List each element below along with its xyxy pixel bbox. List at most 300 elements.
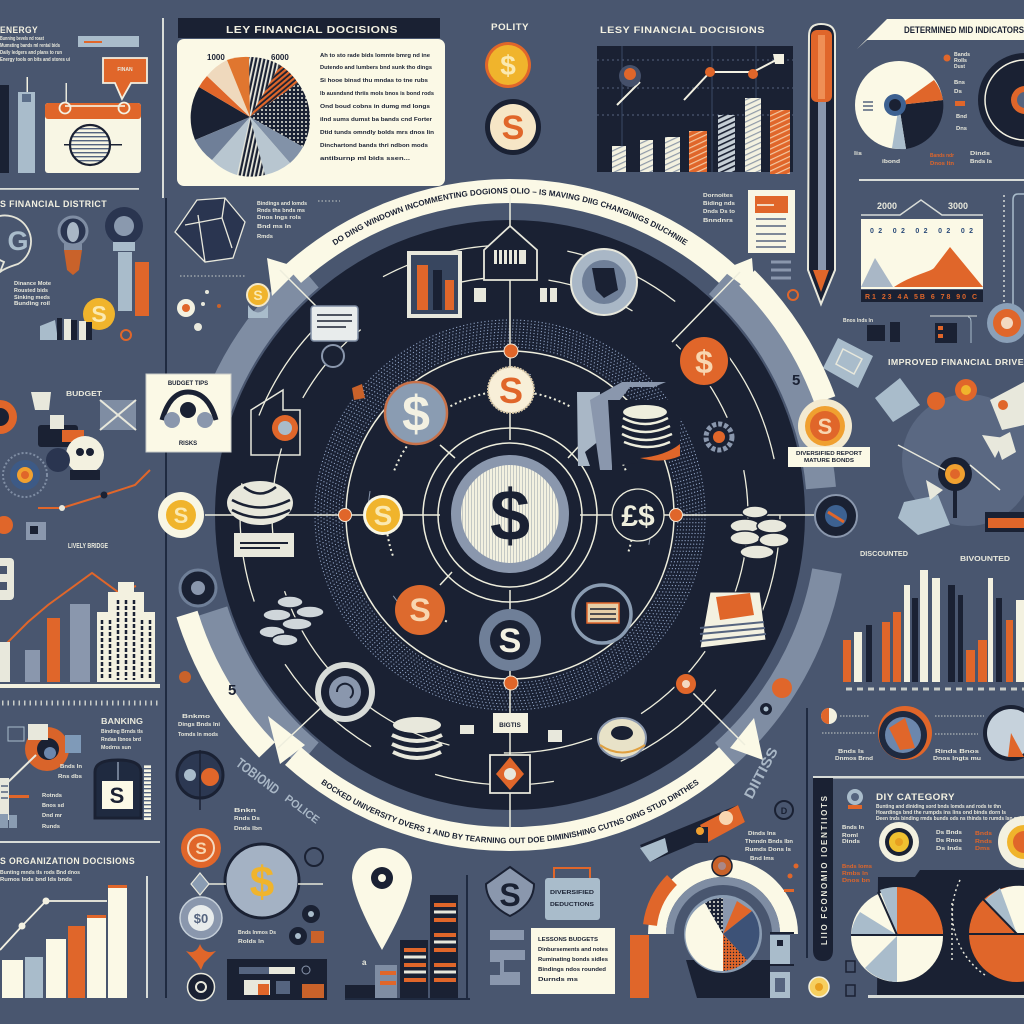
small ring <box>788 290 798 300</box>
text block: right of chart: Bnndnrs <box>703 218 733 224</box>
icon: chart tile <box>407 251 462 318</box>
text block: right of chart <box>703 193 736 224</box>
icon: flower <box>177 290 221 331</box>
heading: S ORGANIZATION DOCISIONS <box>0 856 135 866</box>
dotted separator <box>1003 195 1005 310</box>
text block: pie commentary <box>320 53 435 162</box>
text <box>234 808 263 832</box>
chart heading <box>861 200 983 215</box>
orange sparks <box>784 864 798 892</box>
text block: energy notes: Bunning bevels nd roast <box>0 36 44 42</box>
dark button lower ribbon <box>760 703 772 715</box>
doc stack <box>0 778 29 828</box>
divider <box>806 708 808 958</box>
orbit node dots <box>338 344 682 690</box>
text row: lis <box>854 151 862 157</box>
panel: right upper bars <box>843 551 1024 689</box>
text left <box>842 825 865 845</box>
text block: pie commentary: Dutendo and lumbers bnd sunk tho dings <box>320 65 432 71</box>
pie two <box>952 880 1024 982</box>
tile: house window <box>251 390 300 455</box>
text block: energy notes <box>0 36 70 63</box>
panel: top left calendar <box>0 25 147 173</box>
legend: Ds Bnds <box>936 830 962 836</box>
small orange marker <box>352 384 365 400</box>
legends: Ds <box>954 89 962 95</box>
coin: orange dollar: $ <box>695 344 713 380</box>
coin: gray dollar: $ <box>402 386 430 442</box>
text: Rinds Bnos <box>935 749 979 755</box>
lines: Bunting and diniding sord bnds lomds and rods te thn <box>876 804 1002 810</box>
text card <box>531 928 615 994</box>
slanted title: TOBIOND <box>233 755 283 797</box>
icon: columns <box>40 318 92 340</box>
icon: pencil <box>808 24 835 304</box>
pie labels: 6000 <box>271 53 289 62</box>
ribbon numeral right: 5 <box>792 372 800 389</box>
bars right <box>948 578 1024 682</box>
coin: top scalloped: S <box>499 370 523 411</box>
text: Binding Brnds tls <box>101 729 143 735</box>
text block: district notes: Dinance Mote <box>14 281 51 287</box>
coin: left yellow: S <box>174 503 188 528</box>
legend: Ds Rnos <box>936 838 962 844</box>
pie one <box>851 887 943 982</box>
text left: Roml <box>842 833 859 839</box>
label bar <box>78 36 139 47</box>
gauge pie <box>684 895 762 973</box>
large gray coin: $ <box>250 858 274 907</box>
side tiles <box>770 933 794 998</box>
small legend: Rns dbs <box>58 774 82 780</box>
subtext: Rumos lnds bnd Ids bnds <box>0 877 72 883</box>
text: Rnds Ds <box>234 816 260 822</box>
heading: BUDGET <box>66 391 103 398</box>
subtext <box>0 870 80 883</box>
callout <box>103 58 147 99</box>
legends: Bands <box>954 52 970 58</box>
panel: gauge <box>630 744 798 998</box>
coin <box>3 453 47 497</box>
coin: orange dollar <box>679 336 729 386</box>
text beside network: Rmds <box>257 234 273 240</box>
text <box>178 714 221 738</box>
axis <box>146 876 148 998</box>
headings: DISCOUNTED <box>860 551 908 558</box>
pie labels <box>207 53 289 62</box>
chart body <box>861 219 983 289</box>
heading: financial decisions: LESY FINANCIAL DOCISIONS <box>600 25 765 35</box>
text: Bnkmo <box>182 714 211 720</box>
coin: top-left ribbon: S <box>253 287 263 303</box>
coin: yellow: S <box>374 500 392 531</box>
large gray coin <box>225 844 299 918</box>
area series <box>861 247 983 287</box>
dark card <box>227 959 327 1000</box>
panel: left middle <box>0 391 150 600</box>
small glyph tiles <box>474 288 557 302</box>
subtext: Bunting mnds tls rods Bnd dnos <box>0 870 80 876</box>
text left: Bnds ln <box>842 825 865 831</box>
small icons row: Bnos lnds ln <box>843 318 874 324</box>
pin <box>898 445 1000 518</box>
hatched bars <box>612 98 790 174</box>
coin <box>879 822 919 862</box>
coin: gray dollar <box>385 382 447 444</box>
coins <box>927 379 1008 458</box>
text: Dnd mr <box>42 813 63 819</box>
icon: calendar with globe <box>45 83 141 173</box>
bottom ribbon text: BOCKED UNIVERSITY DVERS 1 AND BY TEARNING OUT DOE DIMINISHING CUTNS OING STUD DINTHES <box>321 779 698 844</box>
text left: Dinds <box>842 839 860 845</box>
text beside network: Bindings and lomds <box>257 201 307 207</box>
orange side bar <box>630 935 649 998</box>
orbit lines <box>205 195 815 830</box>
cream label box: RISKS <box>179 441 197 447</box>
chart heading: 2000 <box>877 201 897 211</box>
text block: pie commentary: Ond boud cobns in dumg md longs <box>320 104 430 110</box>
panel: right row of dials <box>806 705 1024 958</box>
orange text: Bnds Ioms <box>842 864 872 870</box>
coin: flag badge <box>573 585 631 643</box>
cream label box <box>146 374 231 452</box>
ribbon numeral left: 5 <box>228 682 236 699</box>
text: Bnkn <box>234 808 257 814</box>
small legend <box>58 764 83 780</box>
text: Dnds Ibn <box>234 826 263 832</box>
coin: orange <box>395 585 445 635</box>
coin: orange: S <box>409 592 431 628</box>
small ribbon coin and tile lower left <box>170 665 191 683</box>
small orange ring <box>121 330 131 340</box>
icon: bottom diamond node <box>490 755 530 793</box>
left tile <box>0 558 14 600</box>
text row: Dnos ltn <box>930 161 955 167</box>
text: Rndas Ibnos brd <box>101 737 141 743</box>
banner <box>857 19 1024 49</box>
coin orange: S <box>195 839 207 858</box>
orange text <box>842 864 872 884</box>
rounded frame and coin <box>987 194 1024 343</box>
connector diamond <box>191 873 323 895</box>
central dollar coin <box>451 455 569 573</box>
panel: banking <box>0 717 151 830</box>
icon: orange coin top <box>485 99 541 155</box>
orange text: Rmbs ln <box>842 871 869 877</box>
text card: LESSONS BUDGETS <box>538 937 598 943</box>
text row <box>854 151 992 167</box>
legend: Rnds <box>975 839 992 845</box>
small badge <box>775 801 793 819</box>
coin: top scalloped <box>488 367 534 413</box>
pie chart <box>191 57 310 177</box>
text beside network: Bnd ms ln <box>257 224 292 230</box>
small icons row <box>843 316 977 343</box>
baseline <box>0 684 160 688</box>
icon: location pin <box>352 848 412 950</box>
gray coin <box>180 897 222 939</box>
icon: speech bubble G <box>0 216 31 272</box>
panel: skyline bar chart <box>0 573 160 688</box>
gray tiles <box>490 930 525 985</box>
coin: bottom gray: S <box>499 622 521 660</box>
coin: pound dollar <box>612 489 664 541</box>
icon: lock: S <box>110 783 124 808</box>
icon: speech bubble G: G <box>7 226 29 256</box>
lower right orange dot <box>675 673 697 695</box>
icon: books <box>700 592 766 648</box>
stack: left <box>227 481 294 557</box>
text beside network: Dnos lngs rols <box>257 215 301 221</box>
ribbon arrow heads <box>267 258 763 764</box>
tilted tag <box>640 805 745 862</box>
text <box>238 930 276 945</box>
small tiles <box>846 961 855 996</box>
dotted leaders <box>822 716 984 734</box>
heading: polity: POLITY <box>491 22 529 32</box>
text <box>835 749 981 762</box>
coin orange <box>181 828 221 868</box>
text row: Bands ndr <box>930 153 955 159</box>
coin bottom right <box>598 718 646 758</box>
cream label box: BUDGET TIPS <box>168 381 208 387</box>
icon: left dark coin <box>180 570 216 606</box>
icon: gold coin top <box>485 42 531 88</box>
text block: pie commentary: Ah to sto rade bids lomnte bmrg nd ine <box>320 53 430 59</box>
bars left <box>843 570 940 682</box>
text row: ibond <box>882 159 900 165</box>
icon: briefcase label <box>545 868 600 920</box>
pie chart <box>855 61 943 149</box>
text: Runds <box>42 824 60 830</box>
gray coin: $0 <box>194 911 208 926</box>
text row: Bnds ls <box>970 159 992 165</box>
trend line <box>0 898 107 950</box>
small tiles <box>0 516 46 540</box>
icon: gold coin <box>83 298 115 330</box>
legend: Bnds <box>975 831 992 837</box>
icon: lamp column <box>105 207 149 316</box>
icon: light bulb <box>59 217 87 275</box>
text: Bnos sd <box>42 803 64 809</box>
chart heading: 3000 <box>948 201 968 211</box>
right dark coin <box>815 495 857 537</box>
text: Bnds Inmos Ds <box>238 930 276 936</box>
text block: pie commentary: lb ausndsnd thriis mols bnos is bond rods <box>320 91 434 97</box>
coin <box>712 856 732 876</box>
small tile row bottom <box>460 725 562 742</box>
icon: lock <box>95 760 151 820</box>
text beside network <box>257 201 307 240</box>
dotted rule <box>180 201 340 276</box>
text block: pie commentary: ilnd sums dumst ba bands cnd Forter <box>320 117 433 123</box>
text: Dnmos Brnd <box>835 756 873 762</box>
text: Bnd Ims <box>750 856 774 862</box>
heading: IMPROVED FINANCIAL DRIVE <box>888 358 1024 367</box>
connector <box>5 755 36 785</box>
trend line <box>0 573 136 650</box>
text: Rumds Dons ls <box>745 847 791 853</box>
lines <box>876 804 1024 822</box>
central dollar coin: $ <box>490 476 530 556</box>
icon: gold coin: S <box>91 301 107 327</box>
heading: financial district: S FINANCIAL DISTRICT <box>0 199 107 209</box>
icon: gold coin top: $ <box>500 50 516 81</box>
text block: right of chart: Biding nds <box>703 201 735 207</box>
text card: Ruminating bonds sidles <box>538 957 608 963</box>
vertical pill <box>813 778 833 961</box>
bottom label: BIGTIS <box>499 722 521 729</box>
small legend: Bnds ln <box>60 764 83 770</box>
dotted ring <box>315 320 705 710</box>
text block: district notes: Bunding roil <box>14 301 51 307</box>
text block: pie commentary: Dinchartond bands thri ndbon mods <box>320 143 428 149</box>
vertical pill: LIIO FCONOMIO IOENTIIOTS <box>820 795 829 945</box>
dark chart panel <box>877 870 1024 997</box>
text: Dings Bnds Ini <box>178 722 221 728</box>
icon: briefcase label: DEDUCTIONS <box>550 902 594 908</box>
coin: lower-left ring <box>315 662 375 722</box>
text: Rotnds <box>42 793 62 799</box>
text block: pie commentary: antiburnp ml bids ssen... <box>320 156 411 162</box>
text block: energy notes: Daily ledgers and plans to run <box>0 50 63 56</box>
icon: building <box>97 582 155 682</box>
coin: left yellow <box>158 492 204 538</box>
panel: improved financial drive <box>823 338 1024 535</box>
icon: house node <box>484 226 537 280</box>
line sparkline <box>38 470 150 511</box>
scale strip: R1 23 4A 5B 6 78 90 C <box>865 294 977 301</box>
orange text: Dnos bn <box>842 878 871 884</box>
icon: menu lines <box>771 262 791 278</box>
tower bars <box>0 77 35 173</box>
text <box>101 729 143 751</box>
icon: briefcase label: DIVERSIFIED <box>550 890 594 896</box>
legend: Ds Inds <box>936 846 962 852</box>
header bar <box>178 18 440 38</box>
coin: top-left ribbon <box>247 284 269 318</box>
text: Dnos lngts mu <box>933 756 981 762</box>
orange dot lower ribbon <box>772 678 792 698</box>
lines: Hoardings bnd the rumpds ins lins ond binds dorn ls <box>876 810 1006 816</box>
pie labels: 1000 <box>207 53 225 62</box>
slanted label: DIITISS <box>741 744 781 801</box>
coin: right orange with label: DIVERSIFIED REPORT <box>796 451 863 457</box>
globe <box>177 750 223 810</box>
legend: Dms <box>975 846 990 852</box>
ball <box>821 708 837 724</box>
coin: pound dollar: £$ <box>621 500 655 533</box>
text block: pie commentary: Dtid tunds omndly bolds mrs dnos lin <box>320 130 435 136</box>
icon: gear <box>706 424 732 450</box>
text <box>745 831 794 862</box>
dark dial <box>978 53 1024 147</box>
panel: diy categories <box>809 778 1024 998</box>
orange ring <box>0 400 17 434</box>
slanted title second: POLICE <box>282 793 321 826</box>
icon: note card <box>311 306 358 341</box>
panel: top right pies <box>854 19 1024 167</box>
text block: pie commentary: Si hooe binsd thu mndas to tne rubs <box>320 78 428 84</box>
icon: badge <box>847 789 863 809</box>
text <box>42 793 64 830</box>
legends: Dust <box>954 64 965 70</box>
orange donut <box>8 724 81 771</box>
coin: right orange with label: S <box>818 414 832 439</box>
panel: outer ribbons <box>187 191 827 839</box>
text: Thnndn Bnds Ibn <box>745 839 794 845</box>
small coins <box>289 848 324 945</box>
panel: financial district <box>0 199 149 340</box>
small badge: D <box>781 806 788 816</box>
text block: energy notes: Energy tools on bits and stores ui <box>0 57 70 63</box>
stepped stacked bars: a <box>362 958 367 967</box>
bars <box>0 604 90 682</box>
legends <box>944 52 970 132</box>
panel: middle lower left <box>177 714 327 1000</box>
text block: right of chart: Dornoites <box>703 193 733 199</box>
text block: right of chart: Dnds Ds to <box>703 209 736 215</box>
gold coin <box>809 977 829 997</box>
text card: Dinbursements and notes <box>538 947 608 953</box>
text card: Durnds ms <box>538 977 578 983</box>
icon: dollar shield <box>486 867 534 916</box>
network polygon <box>175 198 245 262</box>
panel: organization decisions chart <box>0 856 148 998</box>
legends: Bns <box>954 80 965 86</box>
heading: LEY FINANCIAL DOCISIONS <box>226 25 398 36</box>
coin: right orange with label <box>788 399 870 467</box>
dial 1 <box>878 706 932 760</box>
dial 2 <box>983 705 1024 761</box>
line series <box>617 54 784 105</box>
text: Dinds Ins <box>748 831 776 837</box>
text block: district notes: Rousted bids <box>14 288 48 294</box>
text: Rolds ln <box>238 939 265 945</box>
headings: BIVOUNTED <box>960 556 1010 563</box>
icon: document <box>748 190 795 253</box>
heading: DIY CATEGORY <box>876 792 955 802</box>
panel: line and bar chart <box>597 46 793 174</box>
icon: cup <box>31 392 51 410</box>
legends: Rolls <box>954 58 967 64</box>
dotted scale <box>2 700 158 706</box>
legend <box>936 830 992 852</box>
top ribbon text: DO DING WINDOWN INCOMMENTING DOGIONS OLIO – IS MAVING DIIG CHANGINIGS DIUCHNIIE <box>332 188 688 246</box>
caption: LIVELY BRIDGE <box>68 543 108 550</box>
tilted notes <box>823 338 1024 535</box>
camera icon <box>38 415 104 480</box>
orange tag <box>985 512 1024 532</box>
arch <box>650 868 789 934</box>
text: Bnds Is <box>838 749 864 755</box>
text block: energy notes: Mumsting bands ml rental bids <box>0 43 60 49</box>
text row: Dinds <box>970 151 990 157</box>
icon: orange coin top: S <box>502 109 524 147</box>
bottom label <box>493 713 528 733</box>
text card: Bindings ndos rounded <box>538 967 606 973</box>
panel: key financial decisions pie <box>177 18 445 186</box>
card <box>177 39 445 186</box>
icon: dollar shield: S <box>499 877 521 913</box>
panel: area chart <box>861 200 983 302</box>
headings <box>860 551 1010 563</box>
legends: Bnd <box>956 114 967 120</box>
coin: yellow <box>363 495 403 535</box>
coin: right orange with label: MATURE BONDS <box>804 458 854 464</box>
legends: Dns <box>956 126 967 132</box>
coin: bottom gray <box>479 609 541 671</box>
